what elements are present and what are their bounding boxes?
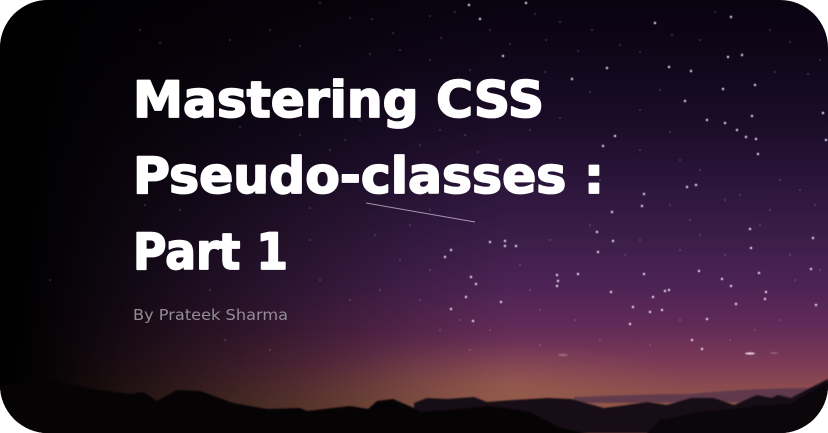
far mountain range: [414, 379, 828, 433]
title line 3: Part 1: [133, 223, 288, 281]
horizon glow: [408, 359, 585, 398]
faint stars: [50, 3, 820, 350]
byline: By Prateek Sharma: [133, 306, 288, 324]
title: [133, 71, 604, 281]
title line 2: Pseudo-classes :: [133, 147, 604, 205]
title line 1: Mastering CSS: [133, 71, 544, 129]
left edge shading: [0, 0, 478, 433]
light streaks near horizon: [558, 352, 778, 356]
near mountain range: [0, 386, 588, 433]
bright stars: [445, 3, 826, 349]
cloud haze on horizon: [574, 388, 828, 403]
right foreground ridge: [640, 378, 828, 433]
shooting star: [366, 203, 475, 222]
